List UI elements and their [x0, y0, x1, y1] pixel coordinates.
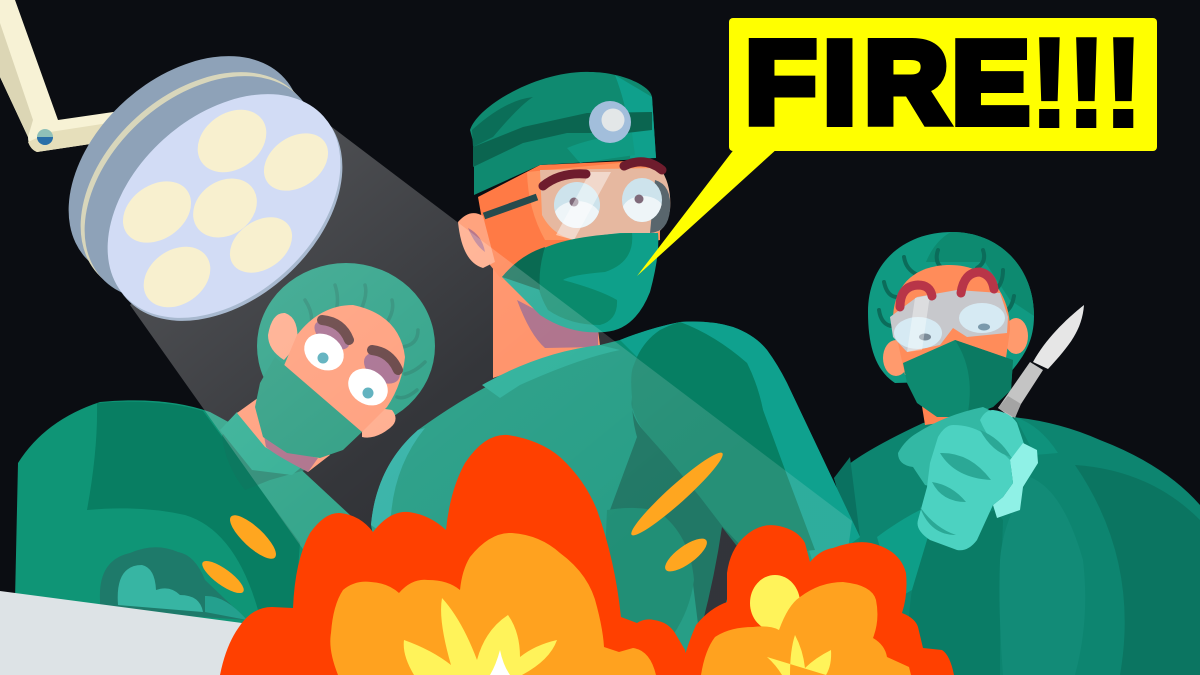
explosion: right flame [680, 525, 954, 675]
left surgeon [15, 263, 435, 675]
gloved hand [898, 407, 1038, 550]
lamp housing [25, 11, 386, 366]
yellow flame [404, 598, 557, 675]
bubble tail [637, 148, 778, 276]
speech bubble [637, 11, 1157, 276]
head mirror [589, 101, 631, 143]
lamp arm [0, 0, 127, 152]
red flame [220, 435, 690, 675]
bubble text: !!! [1028, 11, 1145, 155]
right surgeon [834, 232, 1200, 675]
yellow spikes [767, 635, 831, 675]
center surgeon ear [458, 213, 495, 268]
bubble text: FIRE [746, 18, 1029, 148]
light beam [130, 118, 852, 675]
left surgeon collar [220, 412, 310, 475]
center surgeon collar [482, 345, 620, 398]
center surgeon goggles [540, 168, 670, 241]
center surgeon face [478, 160, 660, 280]
white core [490, 650, 510, 675]
right surgeon mask [903, 340, 1013, 417]
left surgeon ears [268, 313, 396, 438]
scalpel [998, 305, 1084, 418]
right surgeon neck [921, 400, 960, 425]
orange flame [330, 533, 656, 675]
left surgeon eyelids [309, 315, 406, 390]
yellow blob [750, 575, 800, 631]
goggle strap [484, 197, 537, 216]
center surgeon mask [502, 233, 658, 332]
right surgeon ears [883, 318, 1028, 376]
right surgeon face [893, 265, 1010, 375]
surgical lamp [0, 0, 386, 366]
lamp bulbs [111, 97, 339, 320]
left surgeon mask [255, 357, 362, 458]
center surgeon body [371, 322, 860, 675]
center surgeon neck [493, 268, 600, 378]
sparks [198, 446, 728, 598]
center surgeon cap [470, 72, 656, 195]
left surgeon eyes [297, 326, 395, 413]
bubble box [729, 18, 1157, 151]
right surgeon body [834, 415, 1200, 675]
left surgeon face [280, 305, 405, 432]
left surgeon cap [257, 263, 435, 429]
right surgeon eyebrows [900, 272, 994, 307]
center surgeon [371, 72, 860, 675]
red flame [680, 525, 954, 675]
right surgeon goggles [890, 290, 1008, 352]
left surgeon neck [237, 395, 330, 472]
left surgeon eyebrows [322, 320, 398, 370]
center surgeon eyebrows [543, 162, 662, 186]
orange flame [701, 582, 911, 675]
operating table [0, 591, 242, 675]
explosion: left flame [220, 435, 690, 675]
left surgeon body [15, 400, 370, 675]
bubble text [746, 11, 1145, 155]
lamp face [64, 49, 384, 363]
organ in open chest [100, 547, 247, 620]
right surgeon cap [868, 232, 1034, 383]
